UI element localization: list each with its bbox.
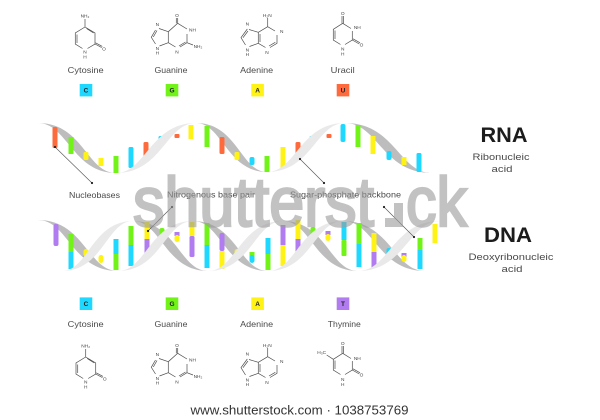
callout: sugar-phosphate backbone, DNA [383, 206, 415, 238]
RNA heading [472, 124, 530, 175]
molecule: uracil (RNA): O [360, 42, 364, 48]
molecule: adenine (RNA) [241, 13, 284, 58]
molecule: guanine (DNA): N [175, 380, 179, 386]
molecule: uracil (RNA): N [341, 46, 345, 52]
molecule: adenine (RNA): H₂N [263, 13, 272, 19]
labels: RNA base names: Adenine [240, 65, 273, 75]
molecule: cytosine (RNA): O [102, 46, 106, 52]
badges: RNA bases: G [169, 88, 175, 94]
badges: DNA bases [80, 297, 349, 310]
callout: nitrogenous base pair [147, 190, 255, 232]
labels: RNA base names: Uracil [331, 65, 355, 75]
molecule: guanine (RNA): H [156, 50, 160, 56]
molecule: guanine (RNA) [151, 13, 203, 56]
DNA helix [38, 220, 440, 271]
footer: stock credit: www.shutterstock.com · 1038753769 [189, 404, 409, 418]
DNA heading: Deoxyribonucleic [468, 252, 554, 263]
RNA heading: RNA [480, 124, 528, 147]
molecule: cytosine (DNA): NH₂ [81, 344, 90, 350]
molecule: guanine (RNA): N [156, 22, 160, 28]
molecule: guanine (DNA): H [156, 380, 160, 386]
molecule: thymine (DNA): H₃C [317, 350, 327, 356]
molecule: guanine (DNA): NH₂ [194, 374, 203, 380]
molecule: cytosine (DNA): H [84, 384, 88, 390]
molecule: cytosine (RNA): NH₂ [81, 14, 90, 20]
molecule: adenine (RNA): N [246, 48, 250, 54]
molecule: adenine (DNA) [241, 343, 284, 388]
RNA helix [38, 123, 432, 173]
callout: nucleobases [54, 146, 120, 200]
labels: DNA base names [68, 319, 361, 329]
molecule: thymine (DNA): H [341, 382, 345, 388]
callout: sugar-phosphate backbone, RNA: Sugar-phosphate backbone [290, 190, 401, 200]
callout: sugar-phosphate backbone, RNA [290, 158, 401, 200]
watermark: ck [406, 163, 468, 241]
molecule: thymine (DNA) [317, 341, 364, 388]
RNA molecules row [75, 11, 364, 60]
molecule: guanine (DNA): O [175, 343, 179, 349]
badges: DNA bases: G [169, 301, 175, 308]
callout: nucleobases: Nucleobases [69, 190, 120, 200]
molecule: adenine (DNA): H [246, 382, 250, 388]
molecule: adenine (RNA): N [280, 29, 284, 35]
molecule: uracil (RNA): NH [354, 25, 361, 31]
badges: RNA bases: U [341, 88, 346, 94]
molecule: cytosine (DNA): O [103, 376, 107, 382]
RNA heading: acid [492, 164, 512, 175]
molecule: guanine (RNA): NH₂ [194, 44, 203, 50]
molecule: cytosine (RNA): H [83, 54, 87, 60]
watermark: shutterst [133, 163, 374, 241]
molecule: guanine (RNA): N [156, 46, 160, 52]
DNA heading: acid [502, 264, 522, 275]
molecule: adenine (RNA): N [246, 22, 250, 28]
badges: DNA bases: T [341, 301, 345, 308]
badges: DNA bases: A [255, 301, 260, 308]
molecule: thymine (DNA): NH [354, 356, 361, 362]
badges: DNA bases: C [84, 301, 89, 308]
DNA molecules row [76, 341, 364, 390]
labels: DNA base names: Guanine [154, 319, 188, 329]
molecule: cytosine (RNA): N [83, 50, 87, 56]
labels: RNA base names: Guanine [154, 65, 188, 75]
molecule: adenine (DNA): H₂N [263, 343, 272, 349]
labels: DNA base names: Cytosine [68, 319, 104, 329]
molecule: cytosine (DNA) [76, 344, 107, 390]
labels: DNA base names: Thymine [328, 319, 361, 329]
labels: DNA base names: Adenine [240, 319, 273, 329]
callout: nitrogenous base pair: Nitrogenous base pair [167, 190, 255, 200]
badges: RNA bases [80, 84, 349, 96]
molecule: guanine (DNA): N [156, 376, 160, 382]
molecule: adenine (RNA): N [265, 50, 269, 56]
labels: RNA base names: Cytosine [68, 65, 104, 75]
DNA heading [468, 224, 554, 275]
molecule: thymine (DNA): O [360, 372, 364, 378]
molecule: cytosine (DNA): N [84, 380, 88, 386]
molecule: uracil (RNA): H [341, 52, 345, 58]
molecule: adenine (DNA): N [246, 378, 250, 384]
molecule: guanine (RNA): O [175, 13, 179, 19]
molecule: guanine (DNA) [151, 343, 203, 386]
RNA heading: Ribonucleic [472, 152, 530, 163]
badges: RNA bases: C [84, 88, 89, 94]
molecule: adenine (DNA): N [280, 359, 284, 365]
DNA heading: DNA [484, 224, 532, 247]
molecule: cytosine (RNA) [75, 14, 106, 60]
molecule: guanine (DNA): N [156, 352, 160, 358]
molecule: guanine (RNA): N [175, 50, 179, 56]
molecule: adenine (DNA): N [265, 380, 269, 386]
labels: RNA base names [68, 65, 355, 75]
molecule: thymine (DNA): N [341, 377, 345, 383]
molecule: adenine (RNA): H [246, 52, 250, 58]
molecule: guanine (DNA): NH [189, 358, 196, 364]
molecule: adenine (DNA): N [246, 352, 250, 358]
badges: RNA bases: A [255, 88, 260, 94]
molecule: guanine (RNA): NH [189, 28, 196, 34]
molecule: thymine (DNA): O [341, 341, 345, 347]
molecule: uracil (RNA) [333, 11, 364, 58]
molecule: uracil (RNA): O [341, 11, 345, 17]
